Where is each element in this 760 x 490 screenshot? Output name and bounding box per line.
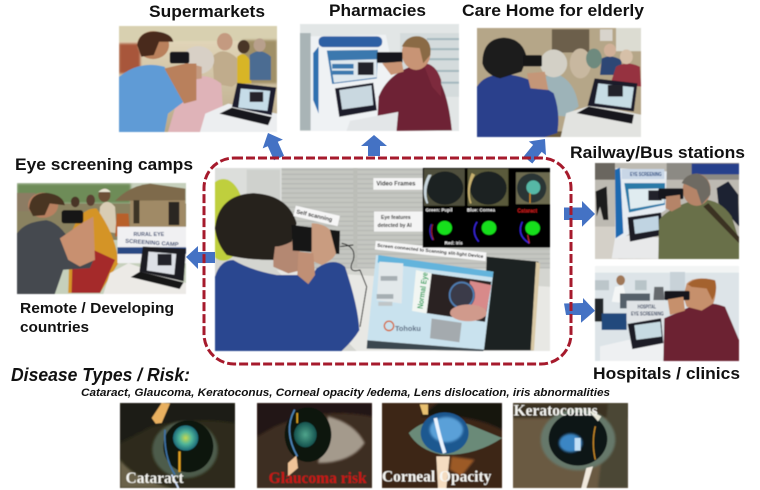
heading: Disease Types / Risk: Disease Types / Risk:: [11, 365, 190, 385]
eye image: glaucoma risk: Glaucoma risk: [269, 470, 367, 487]
photo: railway kiosk: [595, 163, 739, 259]
eye image: keratoconus: [513, 402, 628, 488]
photo: hospital screening: HOSPITAL: [638, 304, 657, 310]
panel: self-scanning setup photo: Cataract: [517, 208, 538, 214]
panel: self-scanning setup photo: Tohoku: [395, 324, 421, 333]
eye image: cataract: [120, 403, 235, 488]
heading: Hospitals / clinics: Hospitals / clinics: [593, 364, 740, 383]
arrow: to pharmacies: [361, 135, 387, 156]
panel: self-scanning setup photo: Green: Pupil: [426, 207, 452, 212]
photo: railway kiosk: EYE SCREENING: [630, 172, 662, 178]
text: Remote / Developing countries: countries: [20, 319, 89, 336]
arrow: to hospitals: [564, 298, 595, 323]
panel: self-scanning setup photo: Red: Iris: [445, 241, 463, 246]
panel: self-scanning setup photo: Blue: Cornea: [467, 207, 495, 212]
panel: self-scanning setup photo: Screen connected to Scanning slit-light Device: [377, 243, 484, 259]
photo: hospital screening: EYE SCREENING: [631, 312, 664, 318]
arrow: to eye camps: [186, 246, 215, 269]
photo: pharmacy kiosk: [300, 24, 459, 131]
panel: self-scanning setup photo: detected by AI: [378, 223, 412, 229]
photo: rural eye camp: SCREENING CAMP: [125, 239, 179, 248]
heading: Care Home for elderly: Care Home for elderly: [462, 1, 645, 20]
arrow: to care home: [524, 139, 546, 164]
dashed frame around central device panel: [204, 158, 571, 364]
photo: rural eye camp: RURAL EYE: [133, 232, 164, 238]
eye image: cataract: Cataract: [126, 470, 185, 487]
text: Remote / Developing countries: Remote / Developing: [20, 300, 174, 317]
photo: hospital screening: [595, 266, 739, 361]
eye image: corneal opacity: [382, 403, 502, 488]
eye image: corneal opacity: Corneal Opacity: [382, 468, 492, 485]
heading: Railway/Bus stations: Railway/Bus stations: [570, 143, 745, 162]
heading: Eye screening camps: Eye screening camps: [15, 155, 193, 174]
photo: rural eye camp: [17, 183, 186, 294]
panel: self-scanning setup photo: Normal Eye: [416, 271, 430, 309]
panel: self-scanning setup photo: Self scanning: [296, 209, 333, 224]
panel: self-scanning setup photo: [202, 168, 550, 351]
arrow: to supermarkets: [263, 133, 284, 160]
photo: care home: [477, 28, 641, 137]
heading: Supermarkets: Supermarkets: [149, 2, 265, 21]
eye image: glaucoma risk: [257, 403, 372, 488]
text: disease list: Cataract, Glaucoma, Keratoconus, Corneal opacity /edema, Lens dislocation, iris abnormalities: [81, 387, 610, 399]
heading: Pharmacies: Pharmacies: [329, 1, 426, 20]
photo: supermarket screening: [119, 26, 277, 132]
arrow: to railway stations: [564, 201, 595, 227]
panel: self-scanning setup photo: Video Frames: [376, 182, 416, 188]
eye image: keratoconus: Keratoconus: [514, 402, 598, 419]
panel: self-scanning setup photo: Eye features: [381, 215, 411, 221]
